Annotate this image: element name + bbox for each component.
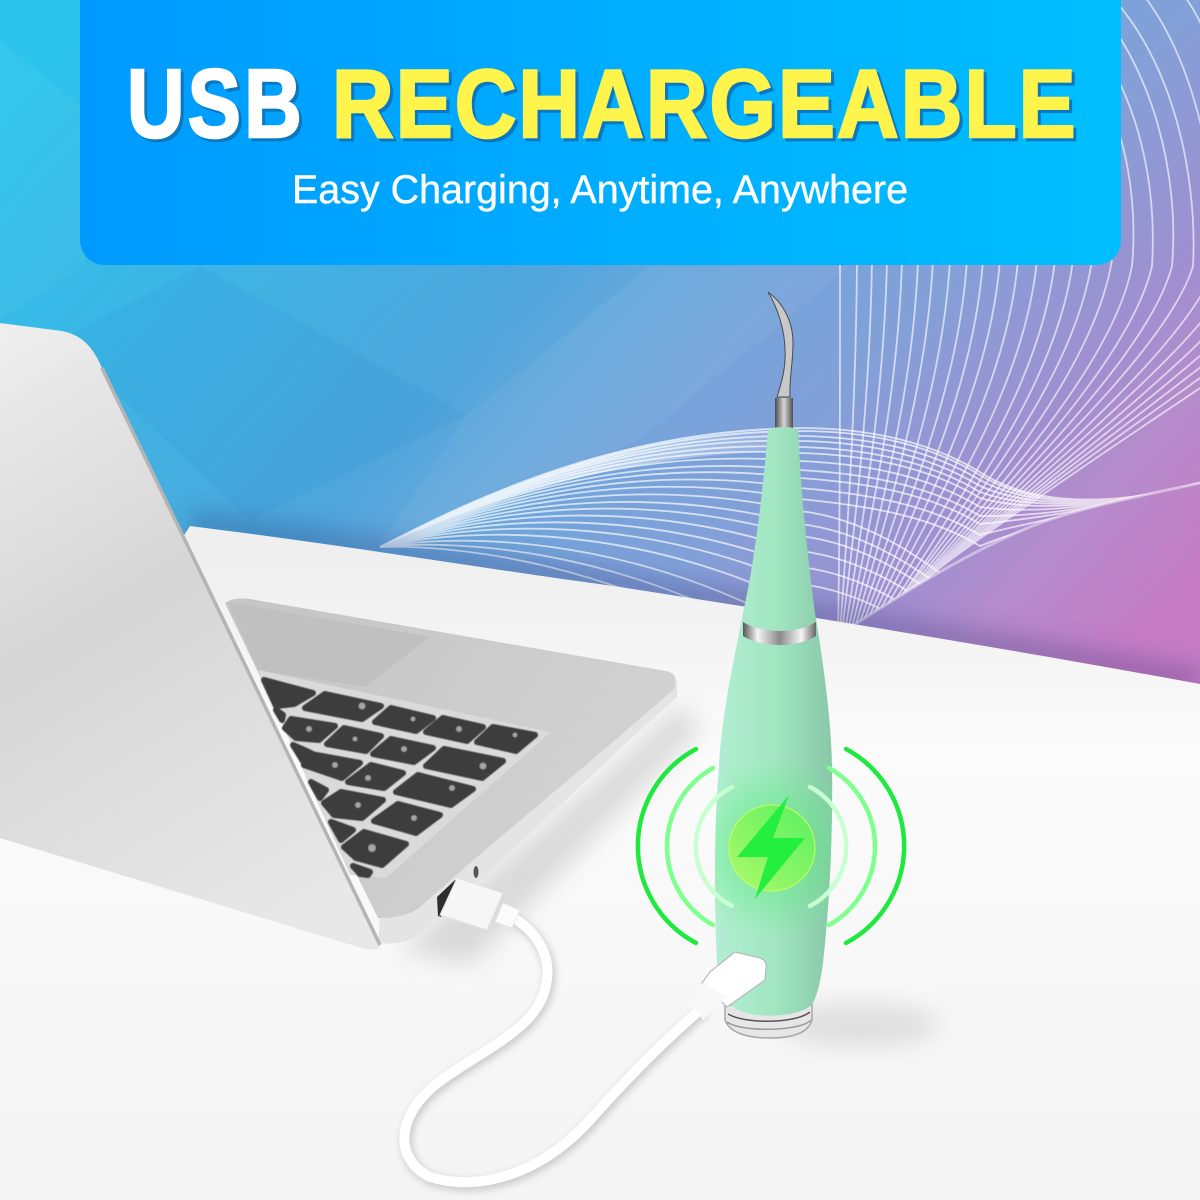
- scaler device: [691, 292, 832, 1038]
- wave lower edge: [840, 483, 1200, 634]
- subtitle: Easy Charging, Anytime, Anywhere: [292, 168, 908, 212]
- keyboard keys: [264, 680, 535, 875]
- flowing horizontal lines: [380, 427, 1200, 609]
- laptop lid: [0, 323, 380, 949]
- signal arcs: [638, 749, 904, 943]
- charging icon: [638, 749, 904, 943]
- shade above table edge: [190, 526, 1200, 684]
- header banner: [80, 0, 1121, 265]
- trackpad: [228, 602, 430, 687]
- usb plug at laptop: [440, 878, 520, 930]
- device shadow: [780, 1003, 940, 1047]
- usb cable: [404, 916, 702, 1185]
- metal tip: [768, 292, 793, 428]
- laptop shadow: [400, 705, 700, 965]
- table surface: [0, 526, 1200, 1200]
- pale dense wave band: [380, 428, 800, 547]
- lightning bolt: [737, 795, 805, 899]
- laptop: [0, 323, 677, 949]
- laptop base side: [378, 680, 677, 944]
- glow: [715, 772, 832, 924]
- glass base: [725, 1005, 812, 1038]
- background gradient: [0, 0, 1200, 720]
- usb port: [437, 880, 458, 917]
- title: USB: [127, 50, 302, 158]
- keyboard bed: [258, 670, 551, 878]
- headphone jack: [474, 866, 478, 878]
- background facets: [0, 40, 850, 545]
- title: RECHARGEABLE: [332, 50, 1076, 158]
- key glyphs: [306, 702, 518, 852]
- strain relief: [691, 983, 727, 1020]
- flowing vertical lines: [838, 0, 1200, 632]
- metal ring: [743, 622, 816, 645]
- wave pattern: [380, 0, 1200, 624]
- usb plug at device: [702, 952, 766, 1007]
- disc: [729, 805, 815, 891]
- lid edge: [102, 368, 380, 945]
- laptop base top: [225, 598, 676, 918]
- device body: [715, 427, 832, 1016]
